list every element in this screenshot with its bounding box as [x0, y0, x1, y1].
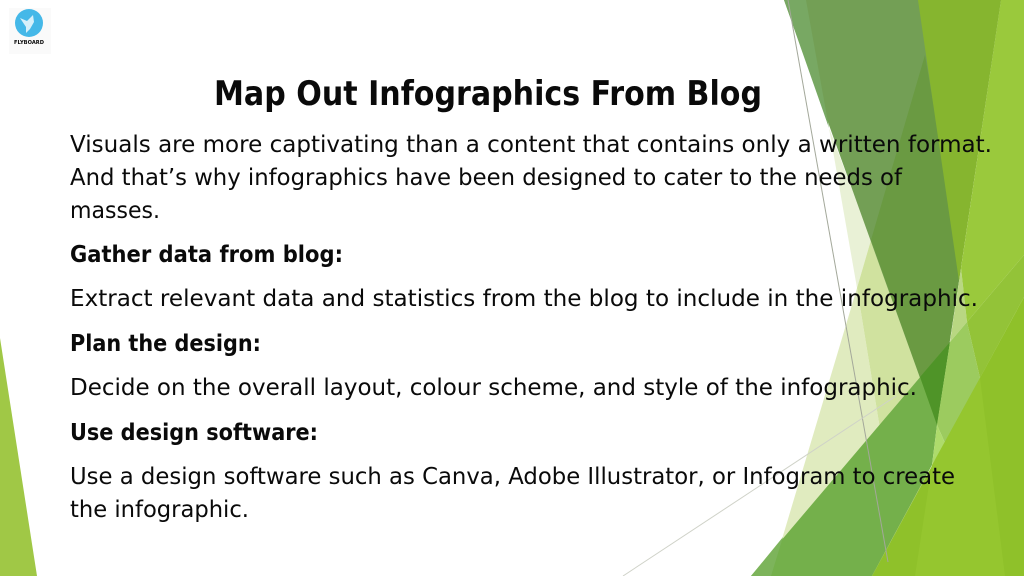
intro paragraph: Visuals are more captivating than a content that contains only a written format.: [70, 132, 992, 158]
dark green facet: [784, 0, 1001, 425]
olive facet: [918, 0, 1001, 281]
thin line: steep: [788, 0, 888, 562]
medium green area: [751, 342, 950, 576]
light facet: tip: [932, 425, 945, 465]
thin line: diagonal: [623, 396, 896, 576]
pale facet: overlap: [857, 240, 937, 576]
medium green bottom-left shade: [751, 537, 783, 576]
left corner triangle: [0, 338, 37, 576]
bottom bright triangle: [872, 297, 1024, 576]
logo bird: [20, 15, 34, 33]
text: use design software: Use a design software such as Canva, Adobe Illustrator, or Infogram to create: [70, 464, 955, 490]
text: gather data: Extract relevant data and statistics from the blog to include in the infographic.: [70, 286, 978, 312]
logo: [9, 8, 51, 54]
pale facet: left: [771, 288, 904, 576]
text: use design software: [70, 464, 955, 523]
heading: plan the design: Plan the design:: [70, 331, 261, 357]
palest facet: [829, 128, 871, 288]
logo backing: [9, 8, 51, 54]
title: Map Out Infographics From Blog: [214, 74, 762, 114]
dark green top sliver: [784, 0, 829, 128]
light facet: upper: [950, 268, 967, 342]
intro paragraph: And that’s why infographics have been designed to cater to the needs of: [70, 165, 903, 191]
dark green inner shade: [871, 55, 961, 425]
logo name: FLYBOARD: [14, 40, 44, 46]
text: plan the design: Decide on the overall layout, colour scheme, and style of the infographic.: [70, 375, 917, 401]
bottom bright highlight: [915, 378, 1005, 576]
heading: gather data: Gather data from blog:: [70, 242, 343, 268]
heading: use design software: Use design software:: [70, 420, 318, 446]
deep green overlap: [920, 342, 950, 425]
light facet: lower: [937, 322, 980, 443]
intro paragraph: [70, 132, 992, 224]
decorative green facets: [623, 0, 1024, 576]
intro paragraph: masses.: [70, 198, 160, 224]
bright right facet: [961, 0, 1024, 322]
logo circle: [15, 9, 43, 37]
right shade: [967, 255, 1024, 378]
text: use design software: the infographic.: [70, 497, 249, 523]
